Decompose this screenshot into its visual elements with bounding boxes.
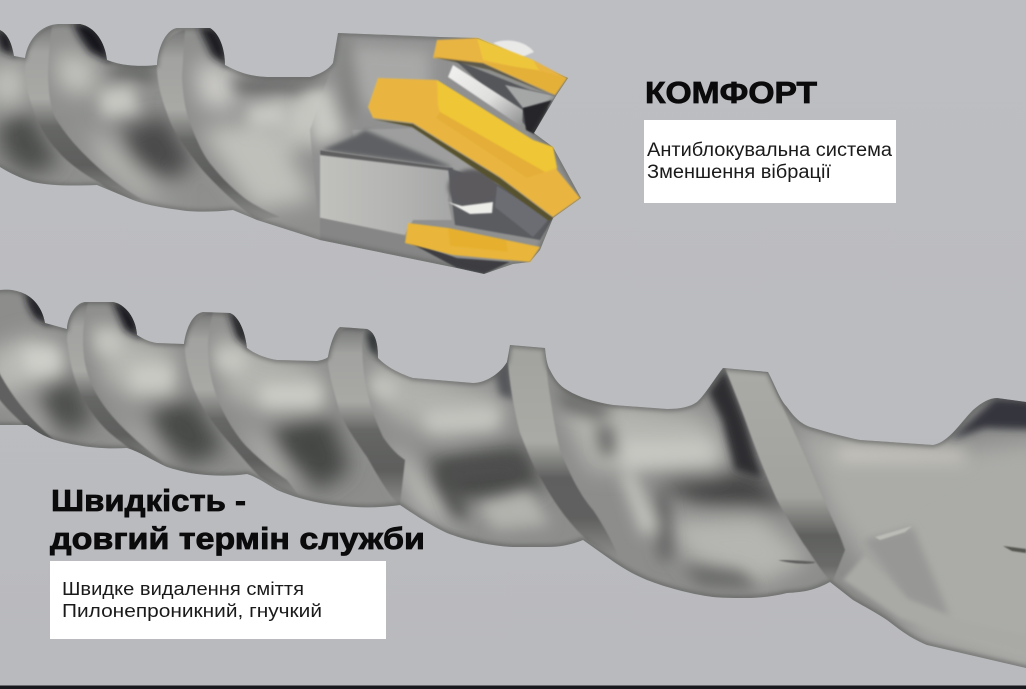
upper flute and silver highlights — [455, 60, 556, 133]
text box: comfort features: Антиблокувальна система — [647, 140, 892, 161]
text box: speed features: Швидке видалення сміття — [62, 579, 304, 599]
deep flute shadows — [25, 290, 1026, 478]
illustration: lower drill shank with spiral flights — [0, 280, 1026, 680]
spiral flight bands — [25, 26, 280, 220]
bottom bar — [0, 686, 1026, 689]
text box: speed features — [50, 561, 386, 639]
head block — [310, 81, 552, 247]
right-end facets — [913, 477, 1026, 627]
white flute edge behind top tip — [493, 40, 534, 58]
heading: comfort: КОМФОРТ — [645, 75, 817, 110]
panel: comfort — [644, 75, 896, 203]
broad tones — [0, 320, 1026, 680]
icon: bottom carbide tip — [405, 223, 540, 262]
panel: speed and durability — [50, 483, 425, 639]
icon: middle carbide tip — [368, 78, 580, 221]
heading: speed and long service life: Швидкість - — [51, 483, 246, 518]
flat milled face — [320, 150, 453, 235]
spiral flight bands — [0, 302, 845, 583]
text box: comfort features — [644, 120, 896, 203]
text box: comfort features: Зменшення вібрації — [647, 162, 832, 183]
drill body shading — [0, 20, 600, 280]
heading: speed and long service life: довгий термін служби — [50, 521, 425, 556]
rim shadow — [0, 24, 581, 274]
rim shadow — [0, 290, 1026, 672]
heading: speed and long service life — [50, 483, 425, 556]
icon: top carbide tip — [433, 38, 567, 96]
illustration: top drill bit with carbide tips — [0, 20, 600, 280]
lower flute — [448, 168, 553, 240]
text box: speed features: Пилонепроникний, гнучкий — [62, 601, 322, 621]
